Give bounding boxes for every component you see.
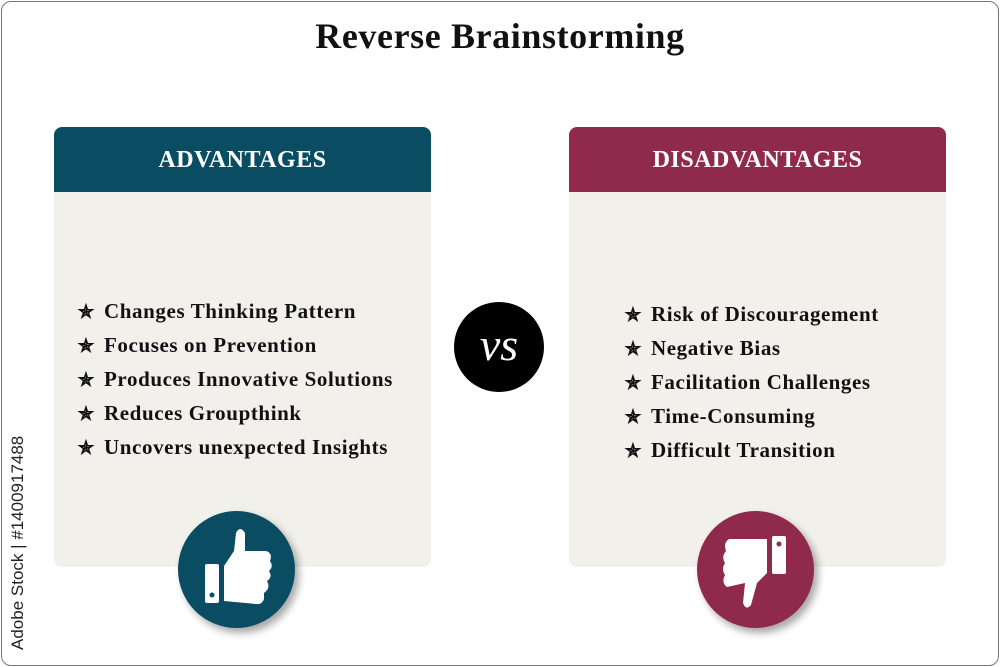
- list: disadvantages: Risk of Discouragement: [651, 302, 879, 326]
- icon: thumbs down: [697, 511, 814, 628]
- vs badge: vs: [480, 319, 518, 370]
- list: disadvantages: Difficult Transition: [651, 438, 835, 462]
- list: disadvantages: ✯: [625, 373, 641, 394]
- heading: disadvantages: [569, 127, 946, 192]
- list: advantages: Changes Thinking Pattern: [104, 299, 356, 323]
- list: disadvantages: ✯: [625, 441, 641, 462]
- heading: advantages: ADVANTAGES: [158, 147, 327, 173]
- list: disadvantages: Facilitation Challenges: [651, 370, 871, 394]
- vs badge: [454, 302, 544, 392]
- heading: advantages: [54, 127, 431, 192]
- heading: disadvantages: DISADVANTAGES: [653, 147, 862, 173]
- list: advantages: ✯: [78, 370, 94, 391]
- list: advantages: ✯: [78, 336, 94, 357]
- list: disadvantages: [624, 302, 879, 462]
- title: Reverse Brainstorming: [315, 16, 685, 56]
- list: disadvantages: ✯: [625, 339, 641, 360]
- list: disadvantages: ✯: [625, 305, 641, 326]
- list: advantages: Produces Innovative Solutions: [104, 367, 393, 391]
- list: disadvantages: Time-Consuming: [651, 404, 815, 428]
- list: advantages: Uncovers unexpected Insights: [104, 435, 388, 459]
- list: advantages: ✯: [78, 302, 94, 323]
- list: advantages: [78, 299, 393, 459]
- list: disadvantages: ✯: [625, 407, 641, 428]
- list: advantages: ✯: [78, 438, 94, 459]
- list: advantages: Reduces Groupthink: [104, 401, 302, 425]
- panel: advantages: [54, 127, 431, 567]
- side credit text: Adobe Stock | #1400917488: [8, 436, 27, 650]
- list: disadvantages: Negative Bias: [651, 336, 781, 360]
- list: advantages: Focuses on Prevention: [104, 333, 317, 357]
- panel: disadvantages: [569, 127, 946, 567]
- list: advantages: ✯: [78, 404, 94, 425]
- icon: thumbs up: [178, 511, 295, 628]
